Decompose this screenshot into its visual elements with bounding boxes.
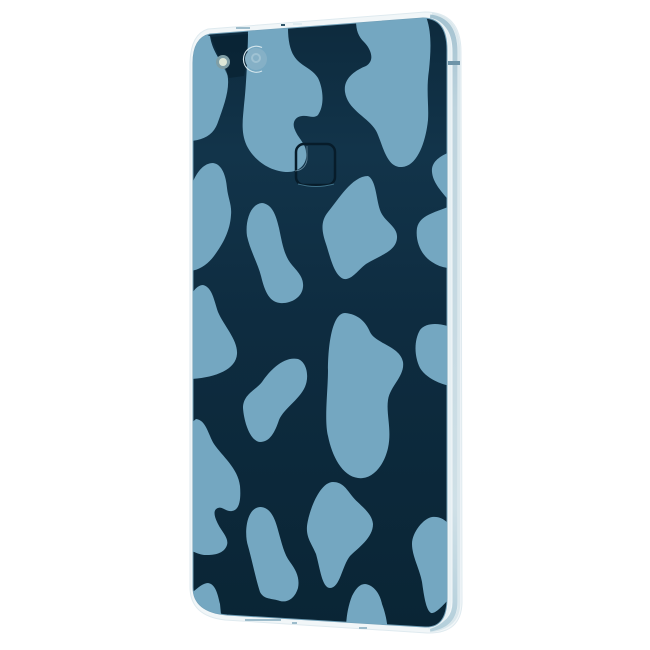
- transparent case outer shell: [190, 12, 462, 633]
- camera housing shadow band: [211, 34, 248, 78]
- flash: [216, 55, 230, 69]
- camera lens: [243, 46, 267, 72]
- cow pattern blobs: [190, 14, 450, 632]
- fingerprint sensor: [295, 144, 335, 186]
- case ports and buttons: [236, 23, 367, 629]
- phone case illustration: [190, 12, 462, 634]
- phone back panel: [193, 18, 447, 627]
